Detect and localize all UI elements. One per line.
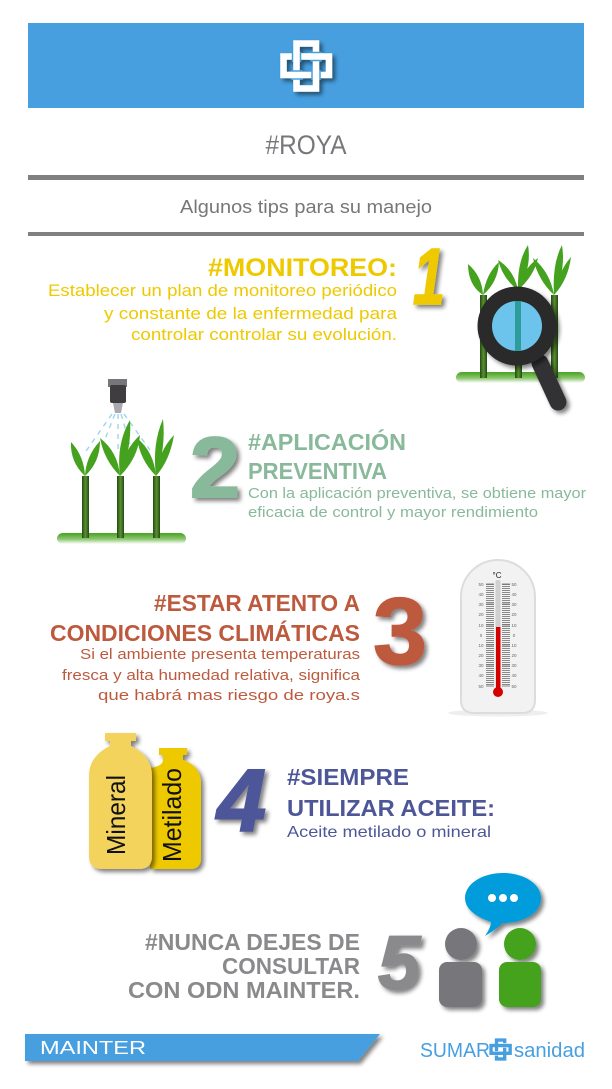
rule under title [28, 175, 584, 180]
icon: thermometer: 50 [511, 582, 517, 587]
icon: thermometer: 30 [511, 663, 517, 668]
subtitle: Algunos tips para su manejo [180, 197, 432, 217]
body text 4: Aceite metilado o mineral [287, 824, 491, 841]
body text 1: Establecer un plan de monitoreo periódico [48, 281, 397, 300]
icon: thermometer: 30 [478, 602, 484, 607]
icon: header logo [284, 44, 329, 88]
number 3: 3 [373, 579, 427, 685]
footer: sumar sanidad logo [420, 1040, 585, 1062]
heading 5 [128, 929, 360, 1003]
bottle: metilado: Metilado [157, 768, 187, 862]
body text 1 [48, 281, 398, 344]
tip 2: aplicacion preventiva [57, 379, 586, 544]
body text 3: fresca y alta humedad relativa, significa [62, 667, 361, 684]
heading 5: CON ODN MAINTER. [128, 977, 360, 1003]
icon: thermometer: 40 [478, 673, 484, 678]
icon: thermometer: 10 [511, 643, 517, 648]
person: green [499, 928, 541, 1007]
icon: thermometer: °C [493, 571, 502, 580]
header banner [28, 23, 584, 108]
body text 3: que habrá mas riesgo de roya.s [98, 687, 360, 704]
body text 2: eficacia de control y mayor rendimiento [248, 504, 538, 521]
number 5: 5 [378, 921, 422, 1006]
bottle: mineral: Mineral [101, 775, 131, 855]
icon: thermometer: 0 [480, 633, 483, 638]
heading 2: #APLICACIÓN [248, 428, 406, 455]
body text 3: Si el ambiente presenta temperaturas [80, 646, 360, 663]
footer: mainter ribbon [25, 1034, 380, 1061]
title: #ROYA [266, 130, 346, 160]
heading 2: PREVENTIVA [248, 458, 387, 484]
heading 4: UTILIZAR ACEITE: [287, 795, 495, 821]
tip 1: monitoreo [48, 232, 585, 402]
icon: thermometer: 20 [511, 653, 517, 658]
icon: thermometer: 10 [511, 623, 517, 628]
footer: sumar sanidad logo: sanidad [514, 1040, 585, 1062]
icon: sprayer over cane [57, 379, 186, 544]
icon: thermometer: 40 [478, 592, 484, 597]
heading 2 [248, 428, 406, 484]
body text 2: Con la aplicación preventiva, se obtiene mayor [248, 485, 586, 502]
icon: thermometer: 20 [478, 612, 484, 617]
number 4: 4 [215, 751, 266, 850]
icon: thermometer: 20 [478, 653, 484, 658]
icon: thermometer: 30 [511, 602, 517, 607]
icon: two people talking [439, 873, 541, 1007]
icon: thermometer: 10 [478, 623, 484, 628]
heading 5: CONSULTAR [222, 953, 360, 979]
icon: thermometer [448, 560, 548, 716]
rule under subtitle [28, 232, 584, 236]
heading 3: #ESTAR ATENTO A [154, 590, 360, 616]
body text 1: controlar controlar su evolución. [131, 325, 397, 344]
icon: thermometer: 50 [478, 684, 484, 689]
icon: thermometer: 10 [478, 643, 484, 648]
body text 2 [248, 485, 586, 521]
heading 4 [287, 764, 495, 821]
icon: thermometer: 50 [511, 684, 517, 689]
tip 3: condiciones climaticas [50, 560, 548, 716]
icon: thermometer: 0 [513, 633, 516, 638]
heading 5: #NUNCA DEJES DE [145, 929, 360, 955]
body text 3 [62, 646, 361, 704]
icon: oil bottles [89, 733, 201, 869]
person: grey [439, 928, 482, 1007]
number 1: 1 [413, 232, 445, 321]
heading 4: #SIEMPRE [287, 764, 409, 790]
icon: thermometer: 50 [478, 582, 484, 587]
number 2: 2 [190, 421, 240, 516]
body text 1: y constante de la enfermedad para [104, 304, 398, 323]
tip 4: aceite [89, 733, 495, 869]
icon: small logo [491, 1040, 510, 1059]
icon: thermometer: 30 [478, 663, 484, 668]
footer: sumar sanidad logo: SUMAR [420, 1040, 490, 1062]
icon: thermometer: 40 [511, 673, 517, 678]
speech bubble [465, 873, 541, 936]
heading 3: CONDICIONES CLIMÁTICAS [50, 619, 360, 646]
icon: thermometer: 40 [511, 592, 517, 597]
heading 1: #MONITOREO: [208, 254, 397, 282]
footer: mainter ribbon: MAINTER [40, 1038, 146, 1058]
tip 5: consultar [128, 873, 541, 1007]
icon: thermometer: 20 [511, 612, 517, 617]
heading 3 [50, 590, 360, 646]
icon: cane with magnifying glass [456, 245, 585, 402]
